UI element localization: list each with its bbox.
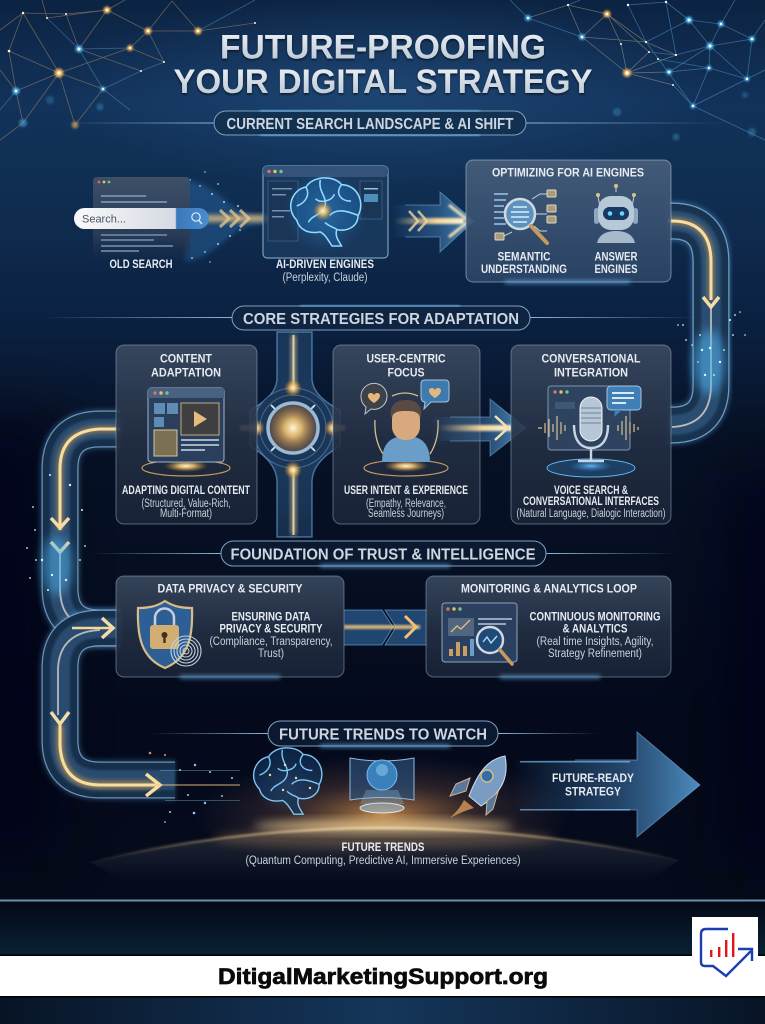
panel: monitoring and analytics loop [426,576,671,678]
section header: core strategies [40,305,700,330]
icon: analytics window with magnifier [442,603,517,664]
heading: conversational integration [542,352,640,380]
text: continuous monitoring: (Real time Insights, Agility, [536,636,654,648]
text: voice search: VOICE SEARCH & [554,483,628,497]
label: AI-driven engines: AI-DRIVEN ENGINES [276,257,374,271]
panel: content adaptation [116,345,257,524]
icon: microphone [538,386,641,477]
label: AI-driven engines: (Perplexity, Claude) [282,272,368,284]
footer background [0,900,765,1024]
title: YOUR DIGITAL STRATEGY [174,63,592,101]
text: future trends [246,840,521,867]
arrow: AI engines to optimizing [392,192,474,252]
label: semantic understanding: UNDERSTANDING [481,262,567,276]
text: ensuring data privacy: (Compliance, Transparency, [210,636,332,648]
label: future-ready strategy: FUTURE-READY [552,771,634,785]
text: voice search [516,483,666,520]
search bar: Search... [82,214,126,226]
section header: future trends: FUTURE TRENDS TO WATCH [279,726,487,744]
text: user intent: Seamless Journeys) [368,508,444,520]
logo [692,917,758,979]
heading: content adaptation: ADAPTATION [151,366,221,380]
icon: answer robot [594,184,638,243]
right flow tube [668,221,746,427]
text: ensuring data privacy: ENSURING DATA [232,610,311,624]
network decoration: top right [510,0,765,140]
icon: content window [142,388,230,476]
text: user intent: (Empathy, Relevance, [366,498,446,510]
text: ensuring data privacy: Trust) [258,648,284,660]
section header: current search landscape [60,110,726,136]
section header: future trends [150,721,598,747]
icon: shield with lock [138,601,201,668]
icon: old search window [93,177,190,260]
heading: user-centric focus: USER-CENTRIC [366,352,446,366]
heading: data privacy: DATA PRIVACY & SECURITY [158,582,302,596]
heading: monitoring: MONITORING & ANALYTICS LOOP [461,582,637,596]
text: adapting digital content: ADAPTING DIGITAL CONTENT [122,483,250,497]
footer strip: website: DitigalMarketingSupport.org [218,964,548,989]
heading: user-centric focus: FOCUS [388,366,424,380]
text: voice search: CONVERSATIONAL INTERFACES [523,494,659,508]
text: adapting digital content: Multi-Format) [160,508,212,520]
text: future trends: FUTURE TRENDS [342,840,424,854]
label: semantic understanding: SEMANTIC [498,250,551,264]
panel: data privacy and security [116,576,344,678]
arrow: user-centric to conversational [430,399,526,456]
title: FUTURE-PROOFING [220,28,546,66]
footer strip: website [0,954,765,998]
planet horizon glow [90,755,680,885]
heading: conversational integration: CONVERSATIONAL [542,352,640,366]
text: adapting digital content: (Structured, Value-Rich, [142,498,230,510]
label: answer engines: ANSWER [594,250,638,264]
label: answer engines: ENGINES [594,262,638,276]
text: user intent [344,483,468,520]
heading: conversational integration: INTEGRATION [554,366,628,380]
text: voice search: (Natural Language, Dialogic Interaction) [516,508,666,520]
text: ensuring data privacy: PRIVACY & SECURITY [220,622,322,636]
text: continuous monitoring: CONTINUOUS MONITORING [530,610,660,624]
left flow tube: lower [51,618,175,796]
text: continuous monitoring: Strategy Refinement) [548,648,642,660]
hub connector: central node [240,332,345,537]
search bar [74,208,209,229]
panel: conversational integration [511,345,671,524]
flow beams: search to AI engines [185,171,267,263]
text: continuous monitoring: & ANALYTICS [562,622,628,636]
section header: core strategies: CORE STRATEGIES FOR ADAPTATION [243,311,519,328]
icon: user with hearts [361,380,449,476]
section header: foundation [90,541,676,567]
label: AI-driven engines [276,257,374,284]
particles after lower tube [149,752,240,823]
panel: user-centric focus [333,345,480,524]
text: continuous monitoring [530,610,660,660]
label: semantic understanding [481,250,567,276]
heading: user-centric focus [366,352,446,380]
text: user intent: USER INTENT & EXPERIENCE [344,483,468,497]
label: old search: OLD SEARCH [110,257,172,271]
title [174,28,592,101]
icon: rocket [450,756,506,818]
section header: foundation: FOUNDATION OF TRUST & INTELLIGENCE [230,546,536,564]
panel: optimizing for AI engines [466,160,671,283]
heading: content adaptation [151,352,221,380]
icon: semantic magnifier [494,190,556,243]
label: future-ready strategy: STRATEGY [565,784,621,798]
icon: hologram [350,758,414,813]
heading: optimizing: OPTIMIZING FOR AI ENGINES [492,166,644,180]
label: answer engines [594,250,638,276]
icon: future brain [253,748,322,815]
icon: AI engines window with brain [263,166,388,258]
heading: content adaptation: CONTENT [160,352,213,366]
text: future trends: (Quantum Computing, Predictive AI, Immersive Experiences) [246,855,521,867]
text: ensuring data privacy [210,610,332,660]
arrow: future-ready strategy [513,732,700,837]
arrow: privacy to monitoring [344,610,428,645]
network decoration: top left [0,0,256,140]
left flow tube: upper [26,429,120,628]
label: future-ready strategy [552,771,634,798]
section header: current search landscape: CURRENT SEARCH LANDSCAPE & AI SHIFT [226,116,514,133]
text: adapting digital content [122,483,250,520]
